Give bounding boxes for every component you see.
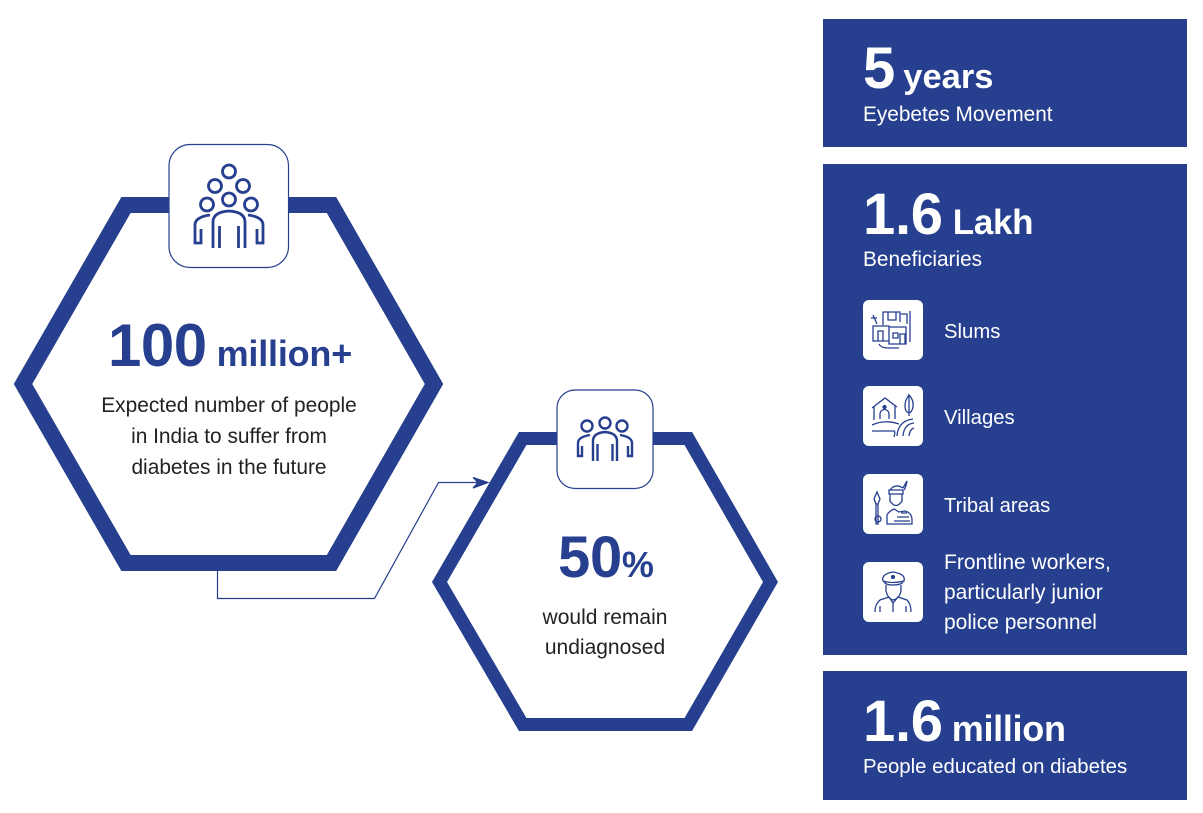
- text: would remain undiagnosed: would remain: [543, 606, 667, 629]
- arrow: connector between hexagons: [218, 478, 488, 598]
- small hexagon: [440, 438, 770, 724]
- icon: tribal areas: [863, 474, 923, 534]
- text: Tribal areas: Tribal areas: [944, 495, 1050, 517]
- panel: 5 years: [823, 19, 1187, 147]
- icon: police officer: [863, 562, 923, 622]
- diagram: hexagons and connector: [14, 144, 778, 731]
- stat: 5 years: 5years: [863, 36, 993, 101]
- text: expected number of people: [101, 394, 357, 479]
- stat: 1.6 million: 1.6million: [863, 689, 1066, 754]
- text: Frontline workers: particularly junior: [944, 581, 1103, 604]
- text: Frontline workers: police personnel: [944, 611, 1097, 634]
- text: Frontline workers: Frontline workers,: [944, 551, 1111, 574]
- icon: crowd of people: [195, 165, 263, 248]
- icon: villages: [863, 386, 923, 446]
- panel: 1.6 million: [823, 671, 1187, 800]
- text: Slums: Slums: [944, 321, 1000, 343]
- text: would remain undiagnosed: [542, 606, 667, 659]
- text: would remain undiagnosed: undiagnosed: [545, 636, 665, 659]
- stat: 100 million+: 100 million+: [108, 312, 352, 379]
- text: Villages: Villages: [944, 407, 1015, 429]
- text: expected number of people: Expected number of people: [101, 394, 357, 417]
- panel: 1.6 Lakh beneficiaries: [823, 164, 1187, 655]
- text: Eyebetes Movement: Eyebetes Movement: [863, 103, 1053, 126]
- icon box: crowd: [169, 144, 288, 268]
- icon: slums: [863, 300, 923, 360]
- text: People educated on diabetes: People educated on diabetes: [863, 756, 1127, 778]
- icon: group of three people: [578, 418, 632, 461]
- text: Beneficiaries: Beneficiaries: [863, 248, 982, 271]
- text: expected number of people: diabetes in the future: [131, 456, 327, 479]
- large hexagon: [23, 205, 434, 563]
- text: Frontline workers: [944, 551, 1111, 634]
- stat: 1.6 Lakh: 1.6 Lakh: [863, 182, 1033, 247]
- icon box: group: [557, 390, 653, 488]
- stat: 50%: 50%: [558, 525, 654, 590]
- text: expected number of people: in India to suffer from: [131, 425, 327, 448]
